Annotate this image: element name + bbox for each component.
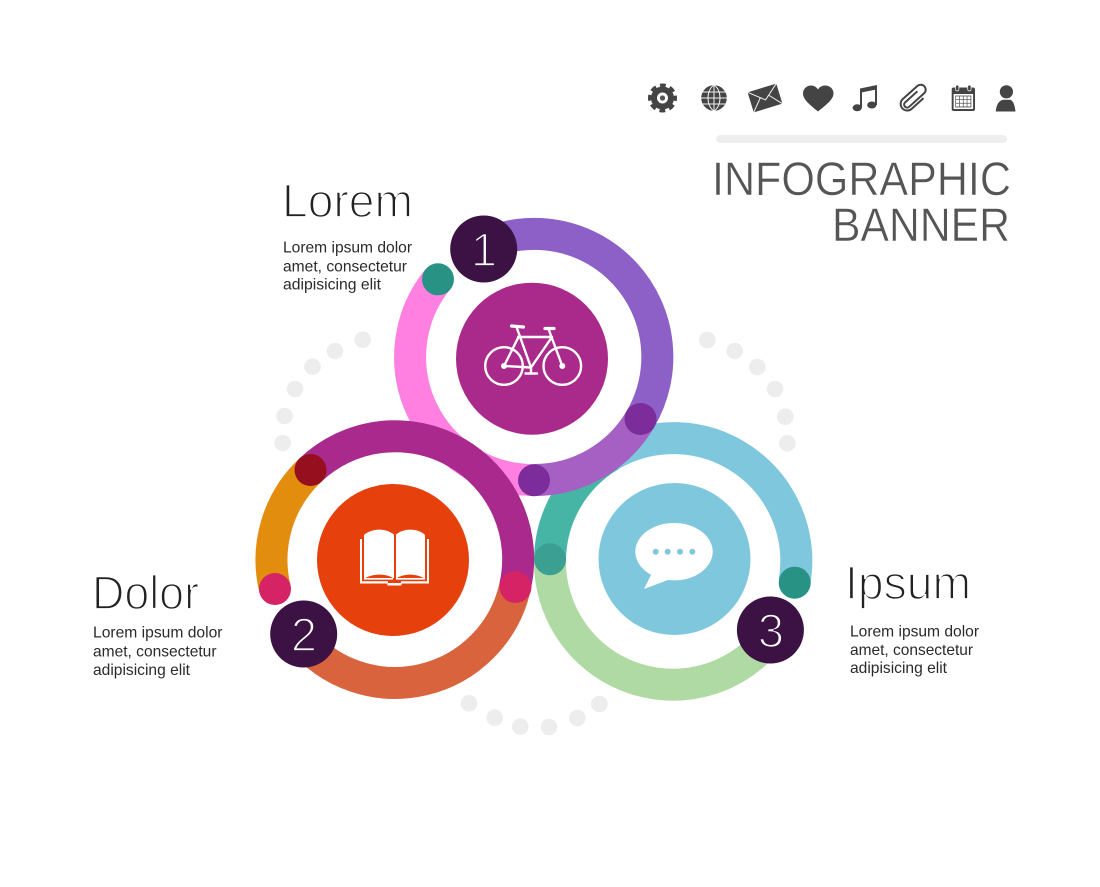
number badge 3: 3 [758,604,784,657]
center disc 2 with book icon [317,484,469,636]
ring 1 junction dots [422,263,656,496]
text block: Ipsum: adipisicing elit [850,660,948,677]
number badge 2: 2 [291,608,317,661]
text block: Lorem: Lorem [282,174,413,227]
number badge 1: 1 [471,223,497,276]
icon: open book [360,530,429,586]
icon row [650,83,1016,113]
text block: Ipsum: Ipsum [845,556,971,609]
background dots: bottom arc [461,695,608,735]
icon: envelope [748,84,782,112]
text block: Lorem: adipisicing elit [283,276,382,294]
ring 3 junction dots [534,543,811,599]
title: INFOGRAPHIC [712,152,1011,205]
text block: Ipsum: amet, consectetur [850,642,974,659]
text block: Lorem [282,174,413,294]
text block: Ipsum [845,556,980,677]
background dots: upper right arc [699,332,796,452]
icon: person [996,85,1016,112]
ring 3: blue, teal and green segments [550,438,796,685]
background dots: upper left arc [274,331,371,451]
icon: gear [650,86,674,110]
ring 1: purple, lavender and pink segments [410,234,657,480]
text block: Lorem: amet, consectetur [283,258,408,275]
ring 2 junction dots [259,454,532,605]
text block: Dolor: Lorem ipsum dolor [93,624,223,642]
icon: speech bubble [635,523,713,589]
icon: calendar [952,85,975,111]
title: BANNER [832,198,1010,251]
title bar [716,135,1007,143]
text block: Dolor: amet, consectetur [93,643,217,660]
icon: paperclip [898,83,930,113]
icon: bicycle [485,326,581,385]
icon: globe [701,85,727,111]
text block: Dolor: Dolor [92,566,199,619]
text block: Ipsum: Lorem ipsum dolor [850,624,980,640]
text block: Dolor: adipisicing elit [93,662,191,679]
center disc 1 with bicycle icon [456,283,608,435]
number badge 3 [737,596,804,664]
center disc 3 with speech bubble icon [598,483,750,635]
number badge 1 [450,216,517,282]
icon: heart [803,86,834,112]
text block: Dolor [92,566,223,679]
title [712,152,1011,251]
icon: music notes [853,85,877,111]
ring 2: magenta, coral and orange segments [271,436,518,683]
number badge 2 [270,600,337,668]
text block: Lorem: Lorem ipsum dolor [283,240,413,257]
